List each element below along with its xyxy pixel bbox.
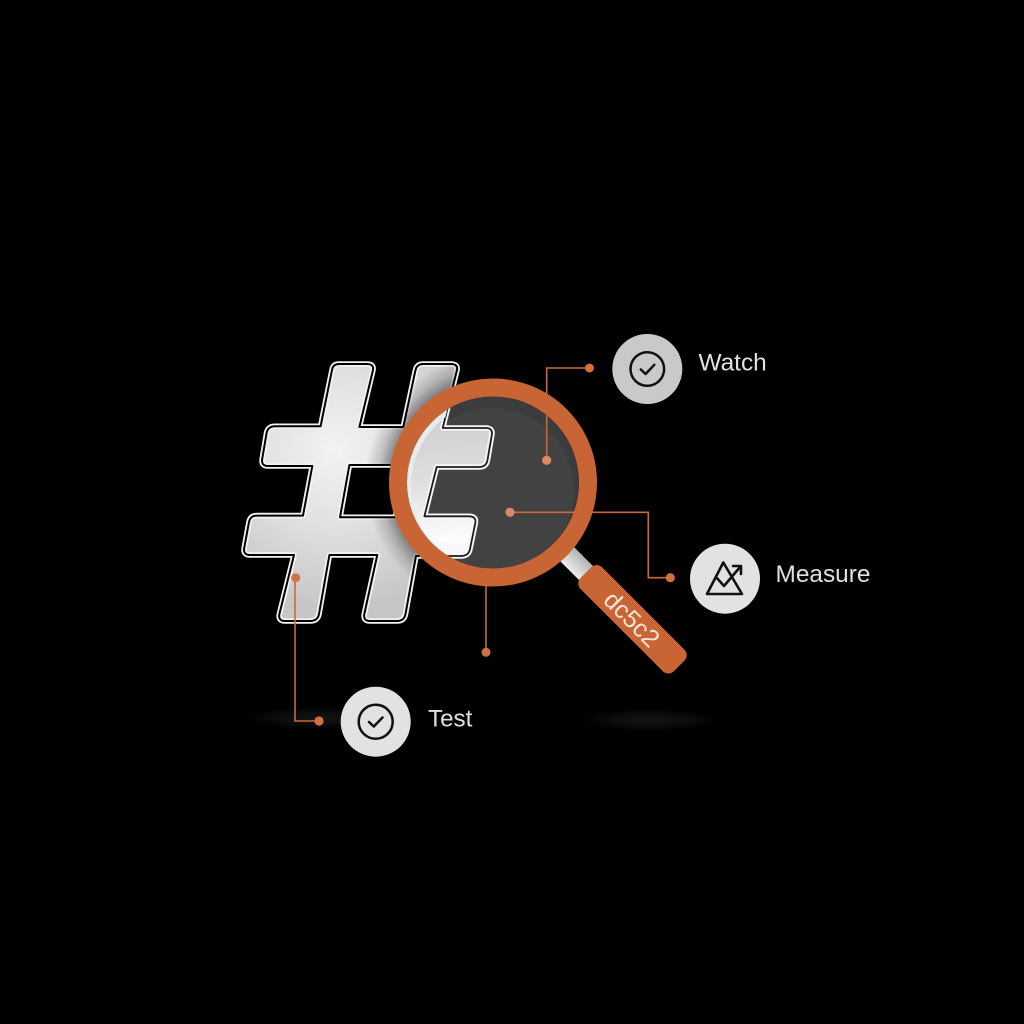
hash symbol (241, 361, 460, 624)
label: measure: Measure (776, 561, 870, 588)
magnifier handle (575, 562, 690, 677)
icon: test check (341, 687, 411, 757)
handle label: dc5c2 (598, 586, 665, 653)
magnifier ring (398, 388, 588, 578)
lens crescent highlight (407, 410, 448, 549)
connector: test (291, 573, 324, 726)
icon: watch check (612, 334, 682, 404)
label: test: Test (428, 706, 473, 732)
label: watch: Watch (698, 350, 767, 376)
ground shadow left (245, 707, 395, 729)
magnifier handle neck (560, 547, 595, 582)
magnified hash (407, 408, 495, 559)
connector: watch (542, 364, 594, 465)
connector: measure (505, 508, 675, 582)
magnifier lens (407, 396, 579, 568)
ground shadow right (582, 709, 718, 731)
icon: measure mountain (690, 544, 760, 614)
lens inner shading (450, 539, 558, 568)
connector: bottom (482, 586, 490, 657)
